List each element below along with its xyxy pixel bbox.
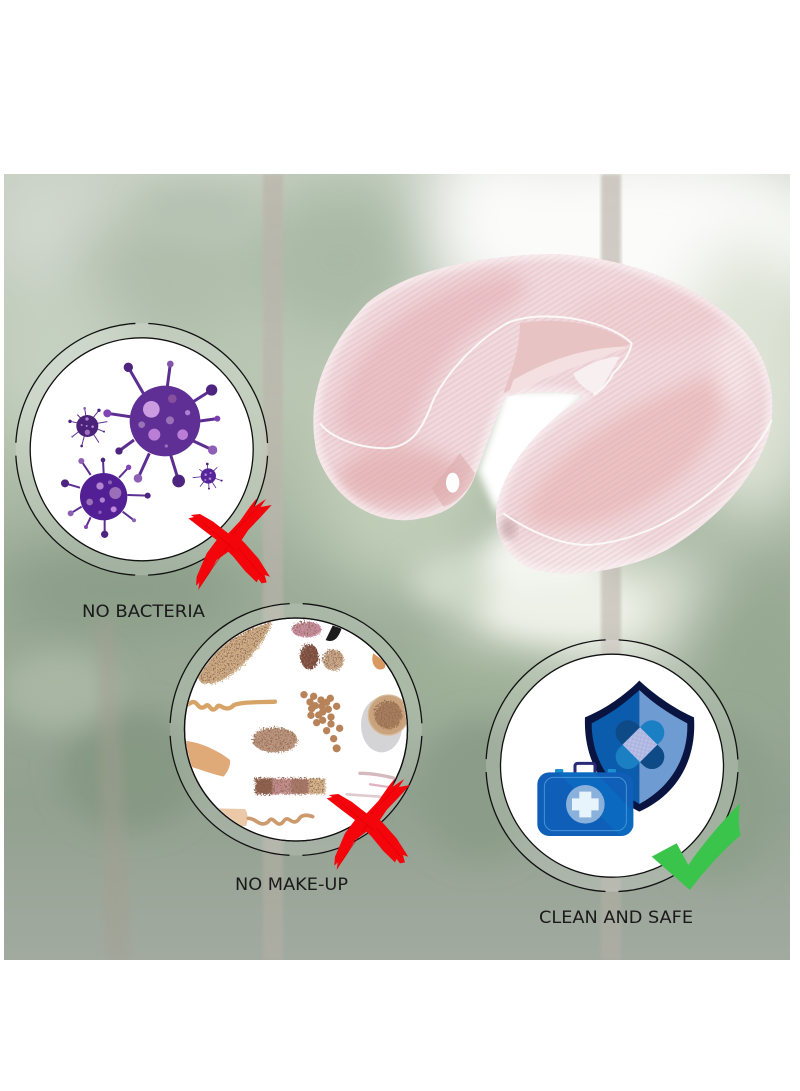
icon: red cross xyxy=(188,498,272,590)
pillow shading and weave xyxy=(314,254,772,574)
label: clean and safe: CLEAN AND SAFE xyxy=(539,908,693,927)
tree trunk xyxy=(95,620,132,960)
panel: no bacteria xyxy=(16,323,272,621)
icon: bacteria xyxy=(61,361,223,538)
white disc xyxy=(184,618,408,841)
large virus xyxy=(103,361,220,487)
pink strokes xyxy=(347,773,400,797)
panel: clean and safe xyxy=(486,640,741,927)
pillow valve tab xyxy=(432,453,475,507)
icon: green check mark xyxy=(652,803,741,890)
brown powder xyxy=(300,644,319,669)
pillow seams xyxy=(320,316,772,545)
blurred window and tree photo backdrop xyxy=(0,140,800,960)
label: no bacteria: NO BACTERIA xyxy=(82,602,206,621)
medium virus xyxy=(61,458,151,538)
bronzer pearls xyxy=(300,691,343,752)
neck pillow product xyxy=(313,254,772,574)
brush tip xyxy=(326,626,342,641)
window post left xyxy=(263,174,283,960)
window post right xyxy=(601,174,621,960)
pillow valve button xyxy=(446,473,459,493)
small virus xyxy=(68,407,107,447)
gauze edge haze xyxy=(313,254,772,573)
foundation dab xyxy=(372,653,385,670)
loose powder xyxy=(195,622,272,684)
crushed powder xyxy=(252,727,298,753)
disc outline xyxy=(184,618,408,841)
inner neck fold xyxy=(503,321,630,393)
inner neck highlight xyxy=(573,357,620,395)
tube and squiggle xyxy=(210,808,313,826)
pink powder xyxy=(292,621,322,637)
foundation smear xyxy=(185,741,230,777)
label: no make-up: NO MAKE-UP xyxy=(235,875,348,894)
pillow body xyxy=(313,254,772,573)
bright gap seen through pillow opening xyxy=(478,390,590,515)
compact xyxy=(361,695,408,752)
foundation swirl xyxy=(188,702,275,710)
make-up swatches xyxy=(185,621,408,826)
white disc xyxy=(500,654,724,877)
ring xyxy=(170,604,422,856)
beige powder xyxy=(323,649,344,671)
icon: shield with bandage xyxy=(585,681,694,812)
icon: red cross xyxy=(327,778,410,870)
eyeshadow bar xyxy=(255,778,325,794)
icon: first aid case xyxy=(537,763,633,836)
tiny virus xyxy=(193,463,223,490)
ring xyxy=(486,640,738,892)
panel: no make-up xyxy=(170,604,422,894)
lobe end shadow xyxy=(500,518,517,539)
ring xyxy=(16,323,268,575)
white disc xyxy=(30,338,253,561)
